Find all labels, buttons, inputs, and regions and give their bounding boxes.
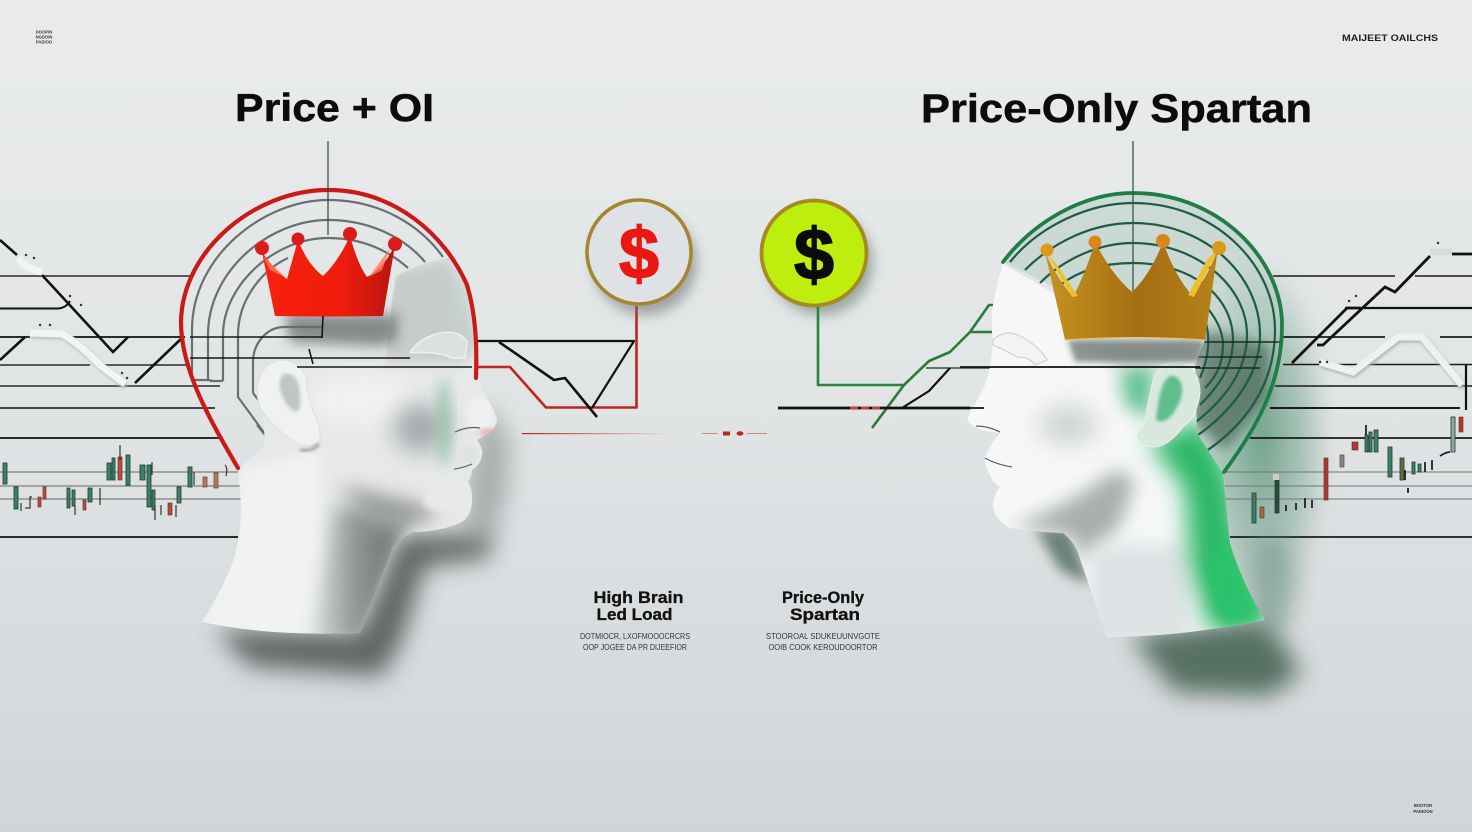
red crown: [255, 227, 402, 316]
header label: top-left mark: PADIOO: [36, 40, 53, 44]
left head: [200, 258, 502, 645]
caption: High Brain Load: OOP JOGEE DA PR DIJEEFIOR: [583, 643, 687, 652]
footer label: bottom-right mark: BOOTOR: [1414, 803, 1432, 808]
coin: green dollar: [762, 200, 873, 315]
right market chart lines: [1225, 243, 1472, 537]
right brain circuit arcs: [1010, 203, 1280, 452]
left brow: [410, 332, 467, 358]
title: Price-Only Spartan: Price-Only Spartan: [921, 87, 1312, 131]
right ribbon zigzag: [1292, 243, 1472, 410]
right crown pointer line: [1132, 141, 1134, 292]
right outer green head outline: [1003, 193, 1282, 472]
left crown shadow: [285, 314, 398, 346]
left candlesticks: [3, 445, 227, 520]
header label: top-left mark: DOOPIN: [36, 30, 52, 34]
right face cross line: [960, 367, 1200, 408]
gold crown: [1040, 234, 1226, 340]
caption: Price-Only Spartan: Price-Only: [782, 588, 865, 607]
footer label: bottom-right mark: PADIOON: [1413, 809, 1433, 814]
coin: red dollar: $: [619, 214, 659, 294]
right connector: coin to chart: [778, 305, 1000, 428]
right ear: [1137, 362, 1200, 447]
right brow: [993, 333, 1047, 365]
right crown shadow: [1068, 340, 1205, 362]
caption: Price-Only Spartan: Spartan: [790, 605, 860, 624]
header label: top-right: MAIJEET OAILCHS: [1342, 33, 1438, 43]
right side background tint: [1190, 250, 1334, 630]
caption: High Brain Load: High Brain: [594, 588, 684, 607]
left outer red head outline: [181, 190, 476, 468]
right dark brain shade: [1190, 330, 1270, 450]
left market chart lines: [0, 240, 241, 537]
left ear: [257, 360, 320, 450]
coin: green dollar: $: [794, 215, 834, 295]
caption: High Brain Load: Led Load: [596, 605, 672, 624]
left nostril and mouth: [454, 428, 480, 469]
right candlesticks: [1252, 417, 1463, 523]
right nostril and mouth: [976, 426, 1012, 467]
left ribbon zigzag: [0, 240, 183, 386]
header label: top-left mark: NGDOIN: [36, 34, 52, 40]
footer label: bottom-right mark: [1413, 803, 1433, 814]
caption: Price-Only Spartan: [766, 588, 880, 652]
right brain interior shade: [1003, 193, 1282, 472]
left brain circuit arcs: [192, 200, 443, 445]
caption: Price-Only Spartan: STOOROAL SDUKEUUNVGOTE: [766, 632, 880, 641]
left face cross lines: [190, 316, 472, 367]
caption: High Brain Load: [580, 588, 690, 652]
caption: Price-Only Spartan: OOIB COOK KEROUDOORTOR: [768, 643, 878, 652]
header label: top-left mark: [36, 30, 53, 44]
left crown pointer line: [327, 141, 329, 235]
right head: [968, 264, 1270, 645]
title: Price + OI: Price + OI: [235, 87, 434, 130]
left connector: coin to chart: [478, 306, 636, 417]
right head shadow: [1035, 528, 1302, 696]
caption: High Brain Load: DOTMIOCR, LXOFMOOOCRCRS: [580, 632, 690, 641]
left head shadow: [215, 400, 510, 676]
centre red dashed line: [522, 431, 767, 436]
coin: red dollar: [587, 200, 697, 315]
